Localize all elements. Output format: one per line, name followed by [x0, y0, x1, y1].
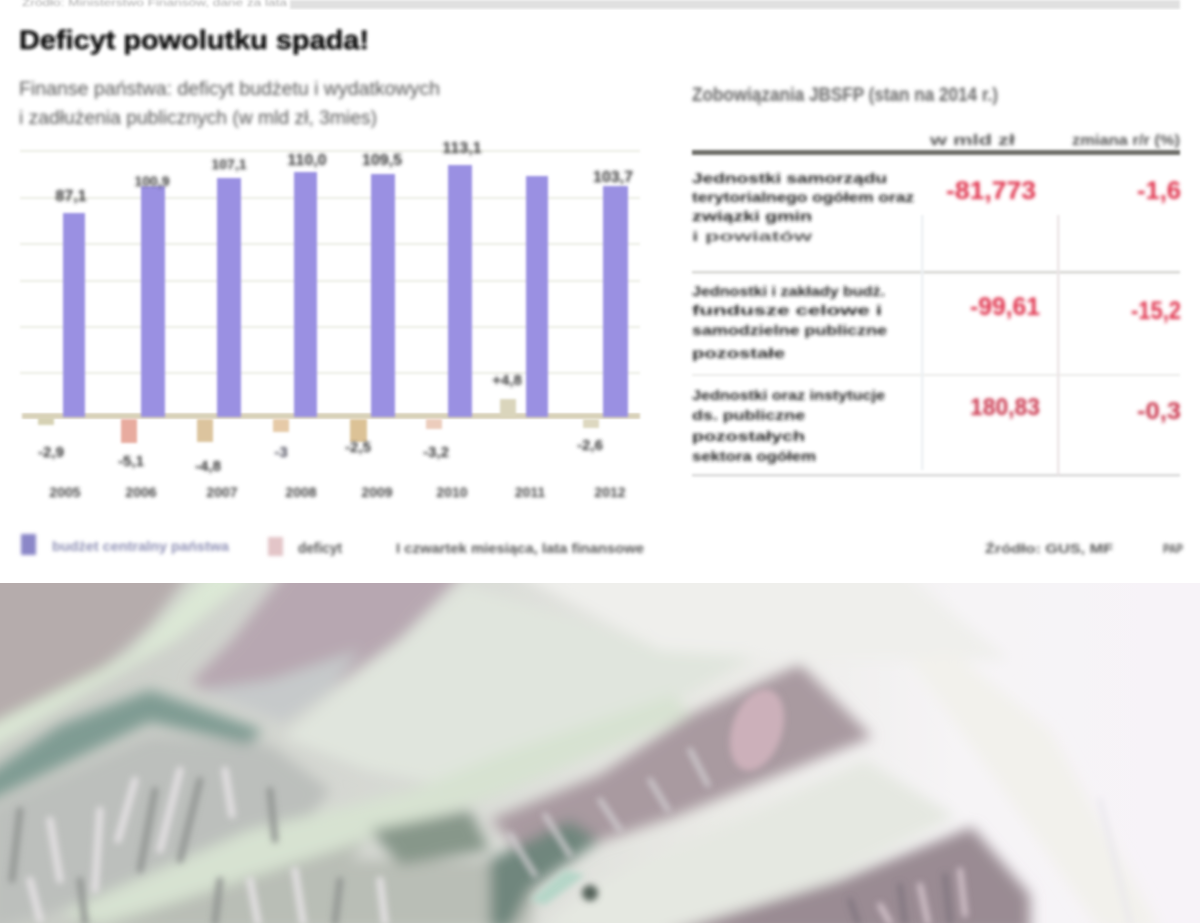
row 1 values: -81,773: [946, 177, 1036, 205]
chart subtitle: i zadłużenia publicznych (w mld zł, 3mies): [19, 108, 377, 129]
photo base: [0, 575, 1200, 923]
banknote shapes: [0, 565, 1160, 923]
year axis labels: 2007: [206, 484, 238, 500]
bar value labels: 87,1: [55, 188, 87, 205]
row 3 label: [692, 387, 885, 464]
top strip: [22, 0, 1180, 9]
row 1 label: [692, 170, 914, 244]
photo: banknotes: [0, 565, 1200, 923]
panel divider: [664, 82, 668, 465]
table footer note: Źródło: GUS, MF: [985, 541, 1113, 556]
chart subtitle: Finanse państwa: deficyt budżetu i wydatkowych: [19, 79, 440, 100]
chart legend: deficyt: [298, 540, 342, 557]
panel: table: [692, 85, 1183, 556]
year axis labels: 2008: [285, 484, 317, 500]
row 3 label: Jednostki oraz instytucje: [692, 387, 885, 403]
row 1 label: Jednostki samorządu: [692, 170, 887, 186]
row 1 label: terytorialnego ogółem oraz: [692, 189, 914, 205]
title: Deficyt powolutku spada!: [19, 25, 369, 55]
bar value labels: [55, 140, 633, 205]
row 3: [692, 387, 1181, 464]
bar value labels: 109,5: [362, 152, 402, 169]
panel: chart: [19, 79, 644, 557]
baseline: [22, 413, 640, 419]
row 3 values: [970, 394, 1181, 425]
row 2 label: Jednostki i zakłady budż.: [692, 283, 885, 299]
row 2 values: [970, 293, 1181, 325]
row 1 values: -1,6: [1137, 177, 1181, 205]
row 1 label: związki gmin: [692, 208, 812, 224]
banknote detail: [6, 688, 970, 923]
chart gridlines: [20, 151, 640, 373]
row 3 label: pozostałych: [692, 428, 805, 444]
row 2 values: -99,61: [970, 293, 1040, 321]
bars: deficit: [38, 399, 599, 443]
table footer note: PAP: [1163, 541, 1183, 556]
bar value labels: 100,9: [134, 173, 170, 189]
row 3 label: ds. publiczne: [692, 407, 805, 423]
deficit value labels: -3,2: [423, 444, 449, 461]
row 1 label: i powiatów: [692, 228, 812, 244]
row 2 label: samodzielne publiczne: [692, 322, 887, 338]
column headers: [929, 132, 1180, 149]
deficit value labels: -5,1: [118, 453, 144, 470]
row 1: [692, 170, 1181, 244]
deficit value labels: -4,8: [195, 458, 221, 475]
year axis labels: 2010: [436, 484, 468, 500]
row 3 values: -0,3: [1137, 398, 1181, 425]
table heading: Zobowiązania JBSFP (stan na 2014 r.): [692, 85, 998, 106]
table footer note: [985, 541, 1183, 556]
year axis labels: 2012: [594, 484, 626, 500]
table rules: [692, 150, 1180, 476]
deficit value labels: +4,8: [492, 372, 522, 389]
bar value labels: 110,0: [287, 152, 327, 169]
bar value labels: 113,1: [442, 140, 482, 157]
year axis labels: 2006: [125, 484, 157, 500]
deficit value labels: -2,5: [345, 439, 371, 456]
chart legend: I czwartek miesiąca, lata finansowe: [396, 540, 644, 556]
column headers: zmiana r/r (%): [1072, 132, 1180, 149]
row 3 label: sektora ogółem: [692, 448, 816, 464]
column headers: w mld zł: [929, 132, 1016, 149]
deficit value labels: [38, 372, 603, 475]
year axis labels: [49, 484, 626, 500]
year axis labels: 2009: [361, 484, 393, 500]
row 1 values: [946, 177, 1181, 205]
deficit value labels: -3: [274, 444, 288, 461]
chart legend: [21, 534, 644, 557]
row 2 label: fundusze celowe i: [692, 302, 882, 318]
row 2 label: [692, 283, 887, 361]
row 2 values: -15,2: [1131, 297, 1181, 325]
deficit value labels: -2,6: [577, 437, 603, 454]
chart subtitle: [19, 79, 440, 129]
deficit value labels: -2,9: [38, 444, 64, 461]
bar value labels: 107,1: [211, 156, 247, 172]
row 2: [692, 283, 1181, 361]
year axis labels: 2005: [49, 484, 81, 500]
row 2 label: pozostałe: [692, 345, 785, 361]
bar value labels: 103,7: [593, 169, 633, 186]
chart legend: budżet centralny państwa: [52, 538, 229, 554]
row 3 values: 180,83: [970, 394, 1040, 421]
year axis labels: 2011: [515, 484, 545, 500]
bars: budget: [63, 165, 628, 417]
